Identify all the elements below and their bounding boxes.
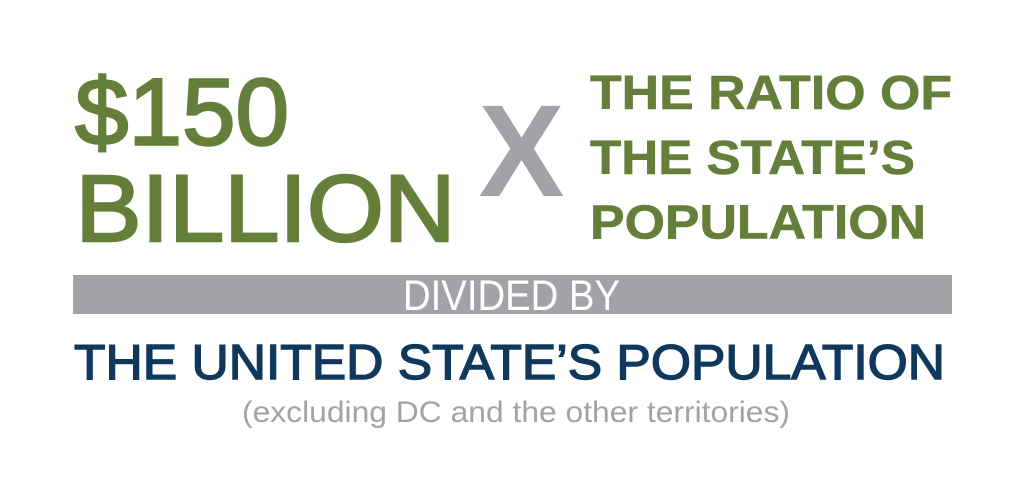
heading: BILLION: BILLION: [76, 156, 456, 262]
text block: the ratio of the state's population: THE RATIO OF: [590, 67, 952, 120]
text block: the united state's population: THE UNITED STATE’S POPULATION: [74, 336, 945, 390]
heading: $150: $150: [75, 60, 289, 166]
divider bar: divided by: [73, 272, 952, 320]
text block: the ratio of the state's population: POPULATION: [590, 196, 926, 250]
text block: the ratio of the state's population: THE STATE’S: [590, 132, 915, 185]
footnote: excluding DC and the other territories: (excluding DC and the other territories): [242, 396, 790, 429]
multiplication sign X: X: [478, 77, 564, 224]
text block: the ratio of the state's population: [590, 67, 952, 250]
divider bar: divided by: DIVIDED BY: [403, 272, 620, 320]
